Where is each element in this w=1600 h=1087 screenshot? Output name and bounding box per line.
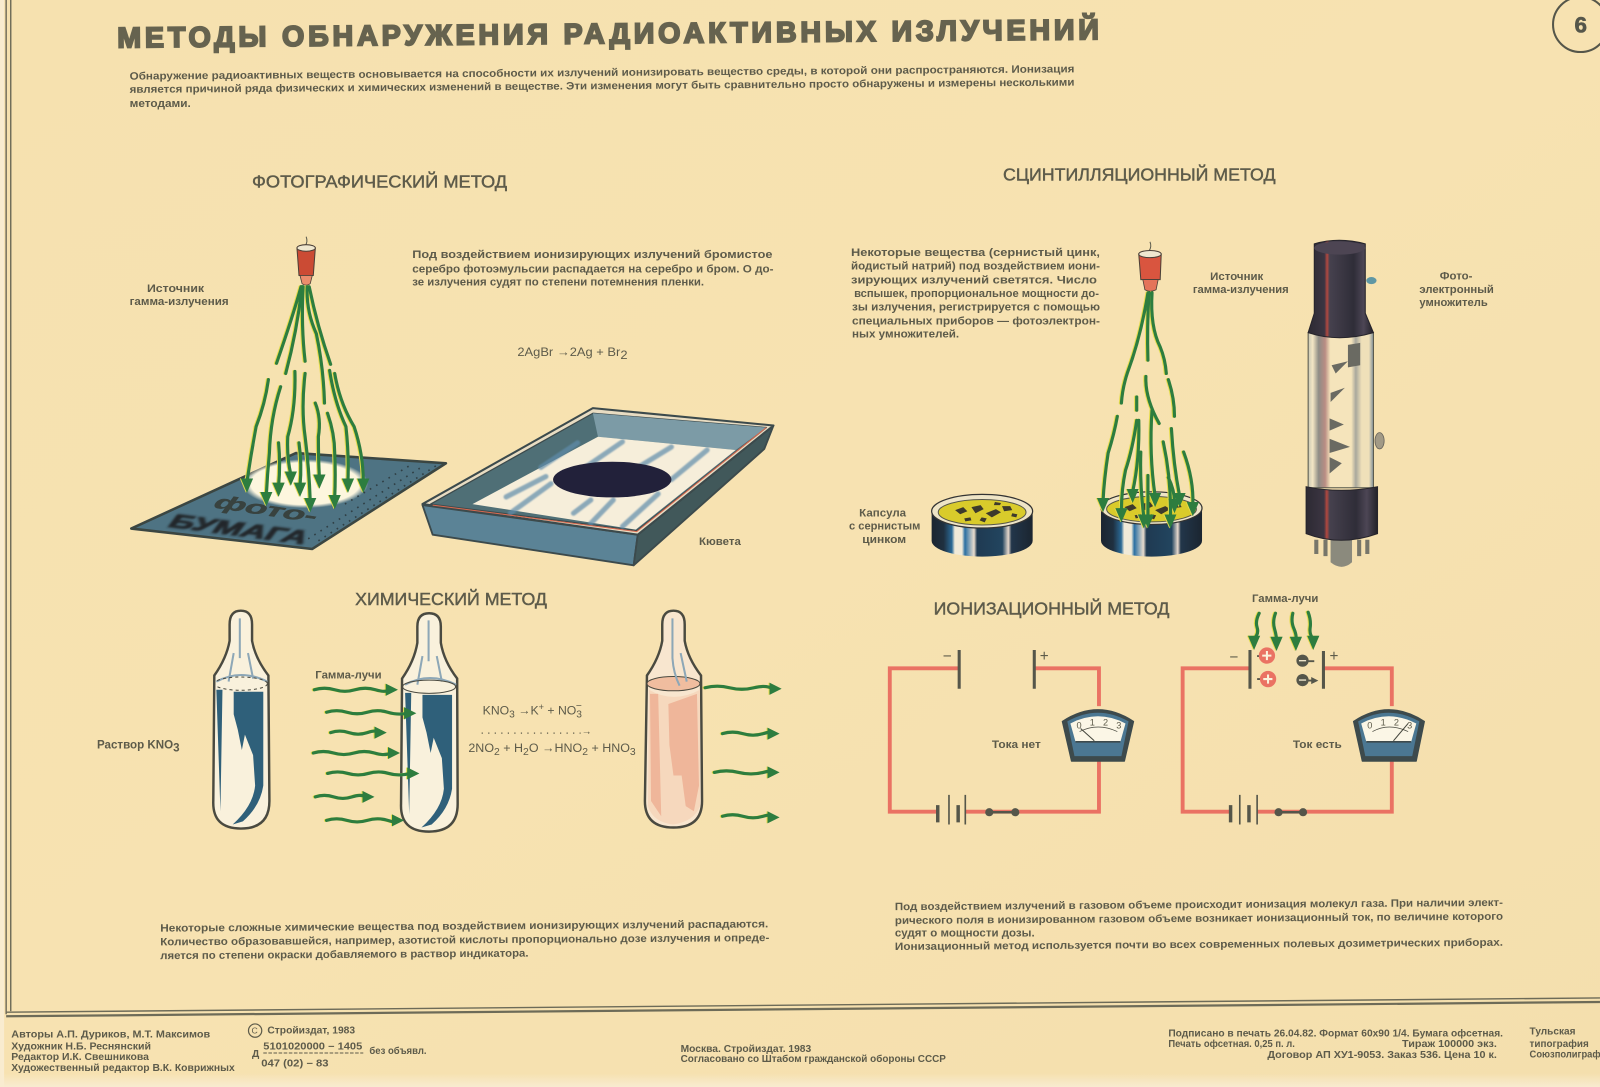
label: gamma source: Источник <box>1210 271 1264 283</box>
photographic paper sheet: фото- <box>208 492 325 526</box>
label: KNO3 solution: 3 <box>173 741 180 755</box>
reaction formulas: 3 <box>509 709 515 720</box>
heading: chemical method: ХИМИЧЕСКИЙ МЕТОД <box>355 589 547 609</box>
circuit with radiation: + <box>1330 648 1339 665</box>
label: gamma rays: Гамма-лучи <box>1252 593 1318 605</box>
footer: print details: Договор АП ХУ1-9053. Заказ 536. Цена 10 к. <box>1267 1050 1497 1061</box>
footer: publisher and index: 5101020000 − 1405 <box>263 1041 363 1052</box>
reaction formulas: 3 <box>630 747 636 758</box>
description text: Некоторые вещества (сернистый цинк, <box>851 247 1100 259</box>
label: gamma rays: Гамма-лучи <box>315 670 382 682</box>
reaction formulas: 3 <box>576 709 582 720</box>
gamma ray arrows <box>1254 612 1313 640</box>
footer: publisher and index: без объявл. <box>369 1046 427 1057</box>
footer: print details: Тираж 100000 экз. <box>1402 1039 1497 1050</box>
developing tray <box>422 408 773 565</box>
description text: зе излучения судят по степени потемнения пленки. <box>412 277 704 289</box>
footer: print details: Печать офсетная. 0,25 п. л. <box>1168 1039 1295 1050</box>
circuit without radiation: − <box>943 648 952 665</box>
capsule with zinc sulfide <box>932 494 1033 557</box>
footer: publisher and index: С <box>252 1026 258 1036</box>
description text: вспышек, пропорциональное мощности до- <box>854 288 1099 300</box>
description text: специальных приборов — фотоэлектрон- <box>852 315 1100 327</box>
ampoule under irradiation <box>401 613 458 832</box>
meter: no current: 2 <box>1103 717 1108 727</box>
label: KNO3 solution: Раствор KNO <box>97 737 177 751</box>
meter: current flowing <box>1353 710 1424 761</box>
description text <box>160 918 770 962</box>
heading: ionization method: ИОНИЗАЦИОННЫЙ МЕТОД <box>934 598 1170 618</box>
meter: no current <box>1062 710 1134 761</box>
footer: publisher and index: Стройиздат, 1983 <box>267 1026 356 1037</box>
reaction formulas: 2 <box>523 747 529 758</box>
label: gamma source <box>1193 271 1289 296</box>
label: current flowing: Ток есть <box>1293 739 1342 751</box>
footer: print details <box>1168 1029 1503 1061</box>
label: tray: Кювета <box>699 536 742 548</box>
label: photomultiplier: электронный <box>1419 284 1494 296</box>
description text: Под воздействием излучений в газовом объеме происходит ионизация молекул газа. При наличии элект- <box>895 897 1504 913</box>
reaction formulas: O →HNO <box>529 741 582 755</box>
capsule under irradiation <box>1101 492 1202 557</box>
description text: Ионизационный метод используется почти во всех современных полевых дозиметрических приборах. <box>895 937 1503 953</box>
footer: publisher and index <box>248 1024 427 1069</box>
panel: ionization method <box>890 593 1504 953</box>
circuit without radiation: + <box>1040 648 1049 665</box>
panel: chemical method <box>97 611 772 962</box>
description text: ляется по степени окраски добавляемого в раствор индикатора. <box>160 948 529 962</box>
heading: scintillation method: СЦИНТИЛЛЯЦИОННЫЙ МЕТОД <box>1003 165 1276 185</box>
description text: йодистый натрий) под воздействием иони- <box>851 260 1100 272</box>
ampoule with coloured solution <box>645 611 702 828</box>
label: capsule: с сернистым <box>849 521 920 533</box>
label: photomultiplier: умножитель <box>1419 297 1488 309</box>
meter: no current: 1 <box>1090 717 1095 727</box>
description text <box>412 249 774 289</box>
label: photomultiplier <box>1419 271 1494 309</box>
intro text: является причиной ряда физических и химических изменений в веществе. Эти изменения могут быть сравнительно просто обнаружены и измерены несколькими <box>130 77 1074 96</box>
ions between electrodes <box>1257 647 1314 687</box>
formula: 2 <box>620 348 628 362</box>
circuit with radiation: − <box>1230 649 1239 666</box>
description text: Количество образовавшейся, например, азотистой кислоты пропорционально дозе излучения и опреде- <box>160 932 770 948</box>
incoming gamma ray arrows <box>313 688 410 822</box>
footer: credits: Редактор И.К. Свешникова <box>11 1052 150 1063</box>
description text: зирующих излучений светятся. Число <box>851 275 1097 287</box>
reaction formulas: 2 <box>582 747 588 758</box>
label: photomultiplier: Фото- <box>1440 271 1473 283</box>
reaction formulas: + H <box>500 741 523 755</box>
heading: photographic method: ФОТОГРАФИЧЕСКИЙ МЕТОД <box>252 172 507 192</box>
label: capsule: цинком <box>862 534 906 546</box>
icon: gamma source <box>297 237 315 285</box>
description text: ных умножителей. <box>852 329 959 341</box>
label: gamma source: Источник <box>147 283 205 295</box>
reaction formulas: 2 <box>494 747 500 758</box>
reaction formulas: →K <box>515 703 539 717</box>
meter: current flowing: 2 <box>1394 717 1399 727</box>
intro text: методами. <box>130 98 191 110</box>
description text: Некоторые сложные химические вещества под воздействием ионизирующих излучений распадаются. <box>160 918 768 935</box>
title: МЕТОДЫ ОБНАРУЖЕНИЯ РАДИОАКТИВНЫХ ИЗЛУЧЕНИЙ <box>117 12 1099 54</box>
meter: no current: 0 <box>1077 721 1082 731</box>
intro text: Обнаружение радиоактивных веществ основывается на способности их излучений ионизировать вещество среды, в которой они распространяются. Ионизация <box>130 63 1074 83</box>
footer: publisher and index: 047 (02) − 83 <box>261 1058 329 1069</box>
photomultiplier tube <box>1306 240 1384 567</box>
page number badge: 6 <box>1574 13 1587 38</box>
footer: print details: Подписано в печать 26.04.82. Формат 60х90 1/4. Бумага офсетная. <box>1168 1029 1503 1040</box>
label: gamma source: гамма-излучения <box>1193 284 1289 296</box>
intro text <box>130 63 1074 110</box>
footer: Moscow imprint: Москва. Стройиздат. 1983 <box>681 1044 812 1055</box>
footer: credits: Художник Н.Б. Реснянский <box>11 1041 151 1052</box>
photographic paper sheet: БУМАГА <box>163 511 315 548</box>
page number badge <box>1553 0 1600 52</box>
reaction formulas <box>468 701 636 758</box>
panel: scintillation method <box>849 240 1494 567</box>
reaction formulas: − <box>576 701 582 712</box>
ampoule with KNO3 solution <box>213 611 269 829</box>
meter: current flowing: 3 <box>1407 721 1412 731</box>
reaction formulas: → <box>582 727 592 738</box>
reaction formulas: + NO <box>544 703 576 717</box>
footer: Moscow imprint: Согласовано со Штабом гражданской обороны СССР <box>681 1054 946 1065</box>
reaction formulas: + HNO <box>588 741 630 755</box>
meter: no current: 3 <box>1116 721 1121 731</box>
outgoing gamma ray arrows <box>705 686 772 818</box>
reaction formulas: + <box>539 702 544 712</box>
description text: зы излучения, регистрируется с помощью <box>852 302 1100 314</box>
footer: publisher and index: Д <box>252 1049 260 1060</box>
footer: credits: Художественный редактор В.К. Коврижных <box>11 1063 235 1074</box>
label: no current: Тока нет <box>992 739 1041 751</box>
footer: printing house: типография <box>1530 1039 1589 1050</box>
description text: судят о мощности дозы. <box>895 928 1035 940</box>
label: gamma source <box>130 283 229 308</box>
footer: credits <box>11 1030 235 1074</box>
panel: photographic method <box>130 237 774 565</box>
description text <box>895 897 1504 953</box>
description text: серебро фотоэмульсии распадается на серебро и бром. О до- <box>412 263 774 275</box>
label: capsule <box>849 507 920 546</box>
meter: current flowing: 1 <box>1381 717 1386 727</box>
photographic paper sheet <box>131 453 446 549</box>
description text <box>851 247 1100 341</box>
footer: Moscow imprint <box>681 1044 946 1065</box>
gamma rays <box>247 287 363 501</box>
icon: gamma source <box>1139 242 1161 291</box>
formula: 2AgBr →2Ag + Br <box>517 345 615 359</box>
circuit without radiation <box>890 648 1099 824</box>
footer: printing house <box>1530 1027 1600 1061</box>
reaction formulas: KNO <box>483 703 509 717</box>
description text: Под воздействием ионизирующих излучений бромистое <box>412 249 772 261</box>
footer: credits: Авторы А.П. Дуриков, М.Т. Максимов <box>11 1030 210 1041</box>
description text: рического поля в ионизированном газовом объеме возникает ионизационный ток, по величине которого <box>895 911 1504 927</box>
footer: printing house: Тульская <box>1530 1027 1575 1038</box>
label: capsule: Капсула <box>859 507 907 519</box>
reaction formulas: 2NO <box>468 741 494 755</box>
meter: current flowing: 0 <box>1367 721 1372 731</box>
label: gamma source: гамма-излучения <box>130 296 229 308</box>
circuit with radiation <box>1183 648 1392 824</box>
gamma rays <box>1103 293 1193 517</box>
